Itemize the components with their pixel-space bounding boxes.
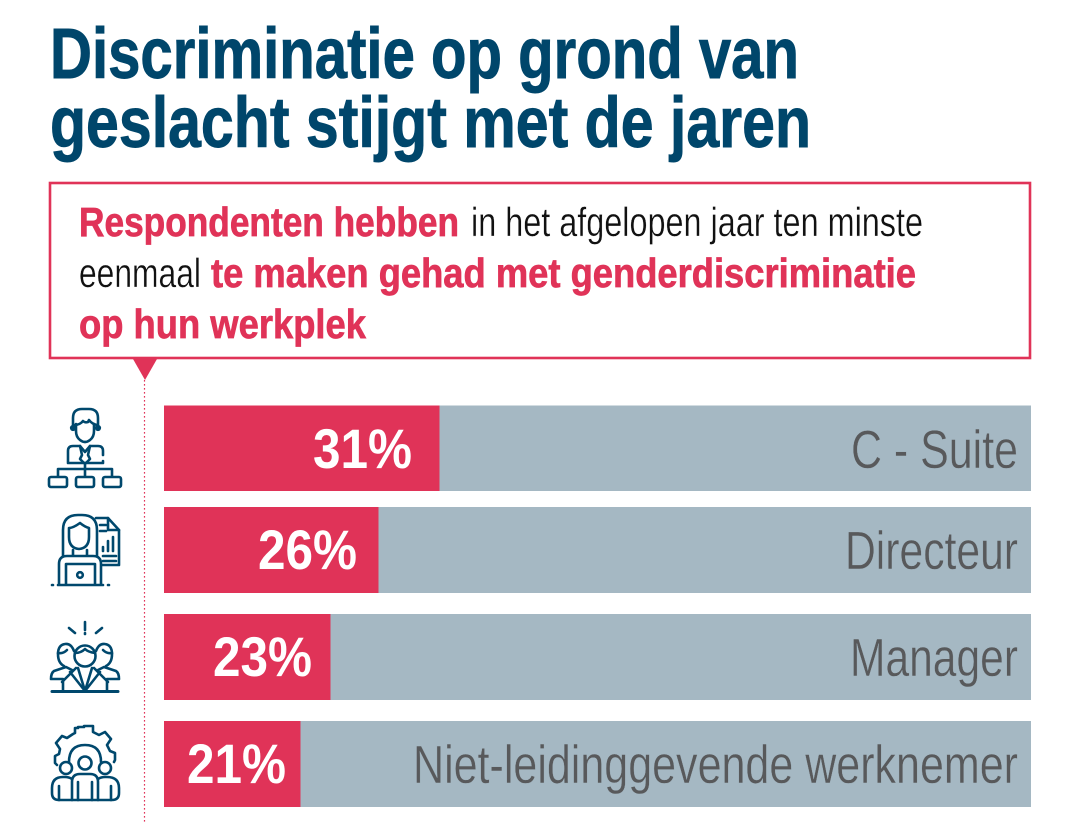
bar: Manager: 23% [213,625,312,688]
callout pointer and dotted guide [133,359,157,823]
bar: Niet-leidinggevende werknemer [164,721,1031,807]
title: Discriminatie op grond van [50,15,799,94]
bar: C - Suite: C - Suite [851,420,1018,480]
bar: Directeur [164,507,1031,593]
bar: Directeur: Directeur [845,521,1018,581]
bar: C - Suite [164,406,1031,491]
title: geslacht stijgt met de jaren [50,84,811,163]
bar: Manager: Manager [850,628,1018,688]
callout text: op hun werkplek [79,301,366,347]
callout text: te maken gehad met genderdiscriminatie [211,250,916,296]
bar: Niet-leidinggevende werknemer: 21% [187,732,286,795]
icon: employees with gear [52,726,119,800]
bar: Directeur: 26% [258,518,357,581]
icon: management team [51,622,119,692]
callout box [50,183,1030,358]
callout text [79,199,923,347]
bar: C - Suite: 31% [313,417,412,480]
icon: woman at laptop with report [52,515,119,585]
callout text: Respondenten hebben [79,199,459,245]
callout text: eenmaal [79,250,201,296]
icon: executive with org chart [49,409,121,487]
bar: Manager [164,614,1031,700]
title [50,15,811,163]
callout text: in het afgelopen jaar ten minste [471,199,923,245]
